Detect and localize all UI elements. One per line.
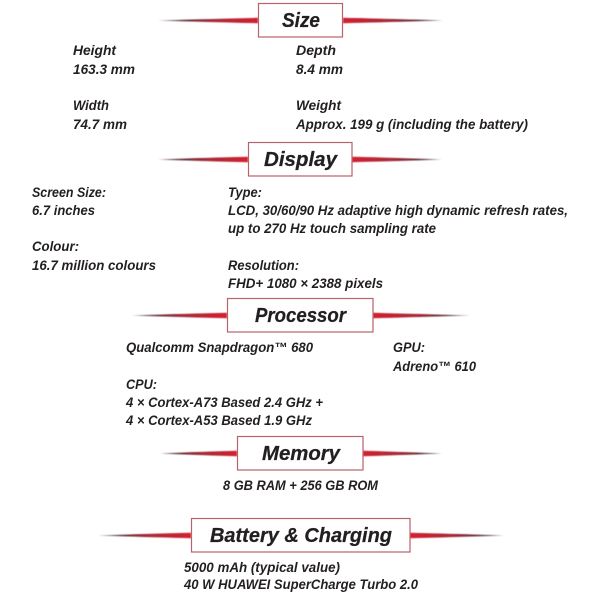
- spec: GPU: [392, 340, 476, 374]
- spec: GPU: Adreno™ 610: [392, 359, 476, 374]
- spec: display type: [228, 185, 568, 236]
- spec: depth: Depth: [296, 43, 336, 58]
- spec: resolution: [228, 258, 383, 291]
- spec: resolution: FHD+ 1080 × 2388 pixels: [228, 276, 383, 291]
- spec: resolution: Resolution:: [228, 258, 299, 273]
- spec: display type: up to 270 Hz touch sampling rate: [228, 221, 436, 236]
- section header: Memory: Memory: [262, 443, 341, 465]
- spec: width: 74.7 mm: [73, 117, 127, 132]
- section header: Processor: [132, 298, 470, 332]
- section header: Battery & Charging: [98, 518, 504, 552]
- spec: CPU: [125, 377, 323, 428]
- spec: CPU: 4 × Cortex-A73 Based 2.4 GHz +: [125, 395, 323, 410]
- section header: Size: [158, 4, 443, 37]
- spec: weight: [295, 98, 528, 132]
- spec: colour: 16.7 million colours: [32, 258, 156, 273]
- spec: screen size: [32, 185, 106, 218]
- spec: depth: [296, 43, 343, 77]
- spec: GPU: GPU:: [393, 340, 425, 355]
- section header: Display: Display: [264, 149, 338, 171]
- spec: height: 163.3 mm: [73, 62, 135, 77]
- spec: screen size: Screen Size:: [32, 185, 106, 200]
- spec: battery and charging: 40 W HUAWEI SuperCharge Turbo 2.0: [183, 577, 418, 592]
- spec: CPU: CPU:: [126, 377, 157, 392]
- section header: Battery & Charging: Battery & Charging: [210, 525, 392, 547]
- spec: depth: 8.4 mm: [296, 62, 343, 77]
- spec: chipset: Qualcomm Snapdragon™ 680: [126, 340, 313, 355]
- spec: colour: Colour:: [32, 239, 79, 254]
- spec: display type: Type:: [228, 185, 262, 200]
- spec: weight: Approx. 199 g (including the battery): [295, 117, 528, 132]
- spec: RAM and ROM: 8 GB RAM + 256 GB ROM: [223, 478, 379, 493]
- section header: Size: Size: [282, 10, 320, 32]
- section header: Processor: Processor: [255, 305, 347, 327]
- section header: Display: [158, 142, 442, 176]
- spec: screen size: 6.7 inches: [32, 203, 95, 218]
- spec: weight: Weight: [296, 98, 342, 113]
- spec: height: [73, 43, 135, 77]
- spec: display type: LCD, 30/60/90 Hz adaptive high dynamic refresh rates,: [228, 203, 568, 218]
- spec: width: [73, 98, 127, 132]
- spec: height: Height: [73, 43, 117, 58]
- spec: battery and charging: 5000 mAh (typical value): [184, 560, 340, 575]
- spec: battery and charging: [183, 560, 418, 592]
- spec: width: Width: [73, 98, 109, 113]
- spec: CPU: 4 × Cortex-A53 Based 1.9 GHz: [125, 413, 312, 428]
- section header: Memory: [160, 436, 442, 470]
- spec: colour: [32, 239, 156, 273]
